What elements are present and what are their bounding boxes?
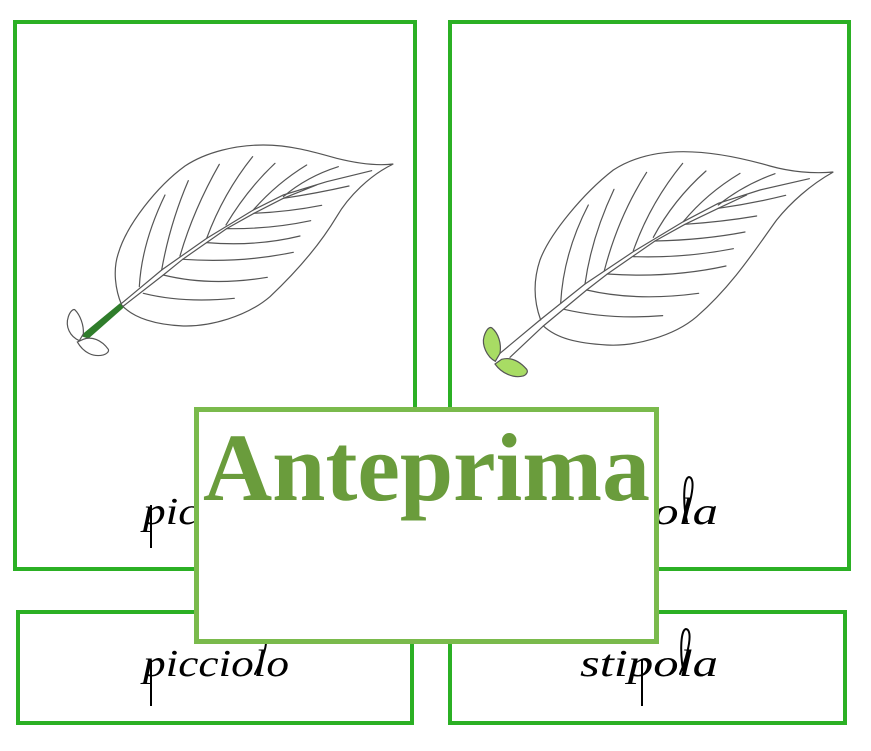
- illustration: leaf with highlighted stipules: [483, 152, 833, 377]
- panel: stipola label card: [450, 612, 845, 723]
- label: picciolo: [139, 642, 289, 706]
- panel: picciolo card: [15, 22, 415, 569]
- preview overlay: [196, 410, 656, 642]
- label: stipola: [580, 477, 718, 548]
- panel: picciolo label card: [18, 612, 412, 723]
- label: stipola: [580, 629, 718, 706]
- overlay title: Anteprima: [203, 414, 650, 521]
- label: picciolo: picciolo: [139, 491, 289, 533]
- illustration: leaf with highlighted petiole: [67, 145, 393, 356]
- panel: stipola card: [450, 22, 849, 569]
- label: picciolo: picciolo: [139, 643, 289, 685]
- label: stipola: stipola: [580, 491, 718, 533]
- label: stipola: stipola: [580, 643, 718, 685]
